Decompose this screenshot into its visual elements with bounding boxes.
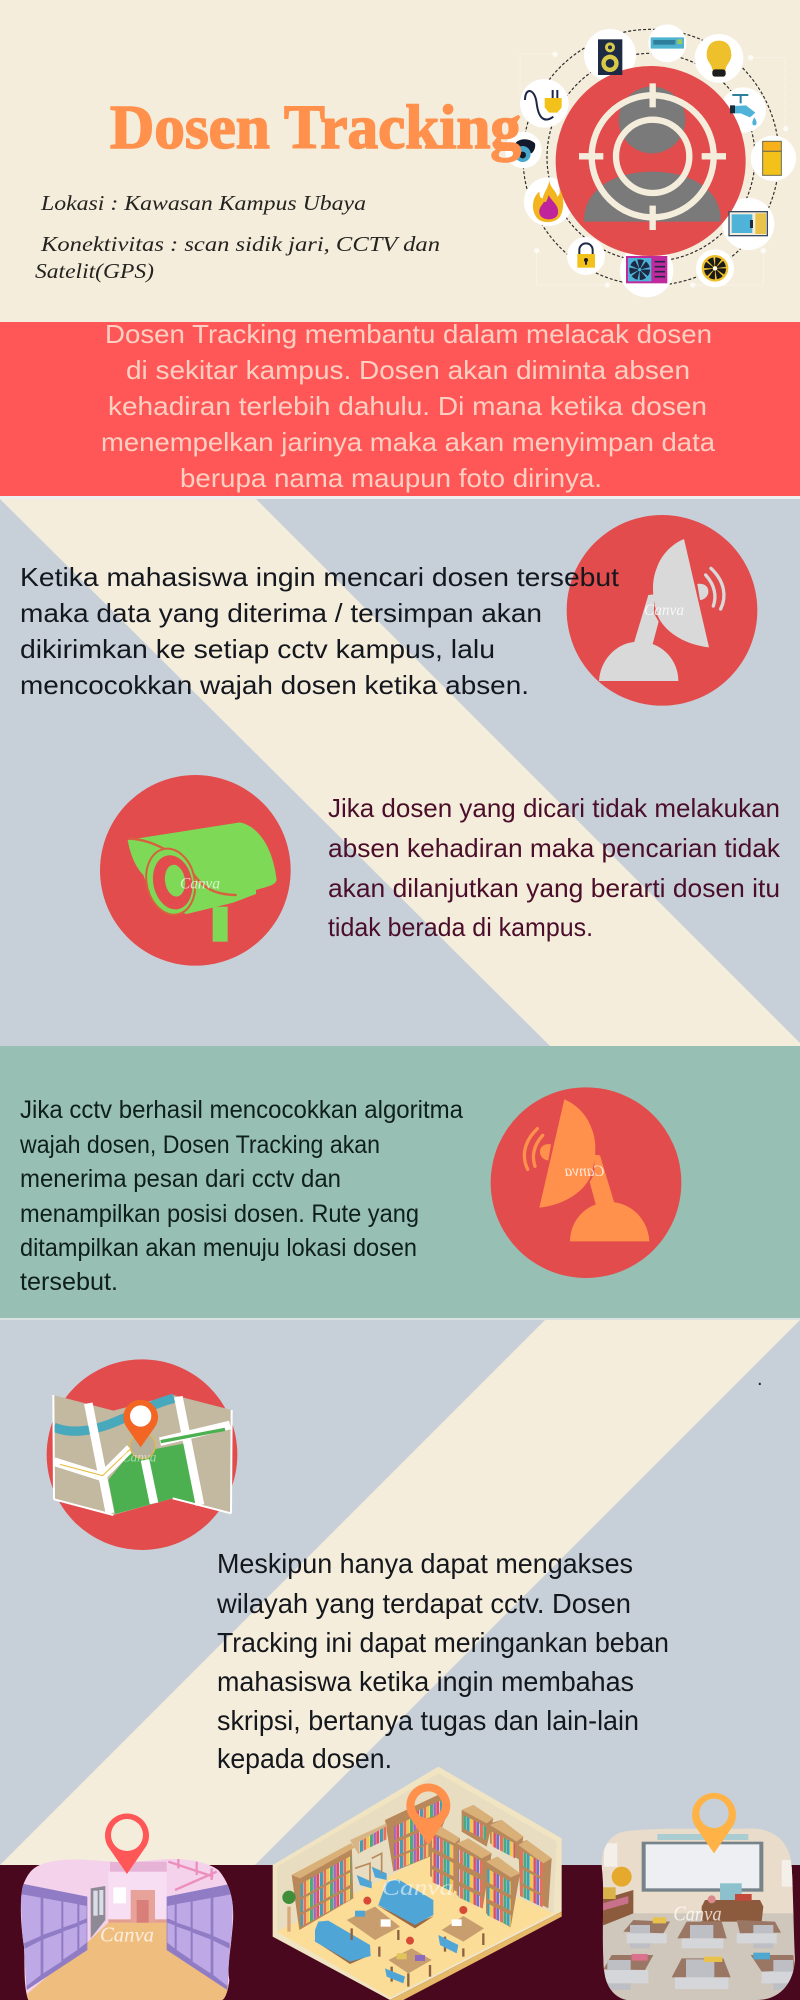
device icon backgrounds <box>505 24 796 297</box>
header illustration: tracked person and device ring <box>505 24 796 297</box>
text block: absent lecturer: Jika dosen yang dicari tidak melakukan <box>328 793 780 823</box>
location and connectivity text: Konektivitas : scan sidik jari, CCTV dan <box>40 232 440 256</box>
intro paragraph: di sekitar kampus. Dosen akan diminta absen <box>126 355 690 385</box>
panel: lower steps background <box>0 1320 800 1865</box>
text block: camera matching: dikirimkan ke setiap cctv kampus, lalu <box>20 634 495 664</box>
icon: padlock <box>577 243 595 268</box>
intro paragraph: Dosen Tracking membantu dalam melacak dosen <box>105 319 712 349</box>
text block: position shown: ditampilkan akan menuju lokasi dosen <box>20 1234 417 1262</box>
text block: closing paragraph: kepada dosen. <box>217 1743 392 1774</box>
icon: power plug <box>525 90 562 120</box>
text block: absent lecturer <box>328 793 781 942</box>
text block: camera matching <box>20 562 620 700</box>
intro paragraph <box>101 319 716 493</box>
tables <box>347 1907 484 1987</box>
stray full stop: . <box>757 1368 763 1390</box>
text block: closing paragraph <box>216 1548 669 1774</box>
left lockers <box>21 1883 87 1990</box>
location and connectivity text: Lokasi : Kawasan Kampus Ubaya <box>40 191 366 215</box>
illustration: locker corridor with red pin <box>17 1814 240 2000</box>
text block: position shown: wajah dosen, Dosen Tracking akan <box>19 1131 380 1159</box>
text block: absent lecturer: akan dilanjutkan yang berarti dosen itu <box>328 873 780 903</box>
text block: closing paragraph: Meskipun hanya dapat mengakses <box>217 1548 633 1579</box>
map pin <box>123 1400 158 1447</box>
text block: closing paragraph: mahasiswa ketika ingin membahas <box>217 1666 634 1697</box>
watermark: Canva <box>122 1450 157 1465</box>
student desks <box>603 1917 795 1990</box>
location pin: yellow <box>692 1793 736 1853</box>
icon: fan <box>702 255 728 282</box>
chairs <box>355 1853 387 1888</box>
panel: maroon footer <box>0 1865 800 2000</box>
watermark: Canva <box>100 1923 154 1947</box>
crosshair <box>579 83 726 230</box>
plant <box>282 1891 296 1932</box>
icon: orange satellite dish <box>491 1087 681 1278</box>
text block: absent lecturer: absen kehadiran maka pencarian tidak <box>328 833 781 863</box>
location and connectivity text: Satelit(GPS) <box>35 259 154 283</box>
projector screen <box>642 1834 763 1892</box>
text block: closing paragraph: skripsi, bertanya tugas dan lain-lain <box>217 1705 639 1736</box>
icon: green CCTV camera <box>100 775 291 966</box>
text block: absent lecturer: tidak berada di kampus. <box>328 912 593 942</box>
wall rack <box>350 1823 387 1854</box>
text block: camera matching: Ketika mahasiswa ingin mencari dosen tersebut <box>20 562 620 592</box>
icon: control panel <box>626 256 667 283</box>
icon: folded map with pin <box>47 1359 237 1550</box>
icon: camera lens <box>514 139 535 162</box>
text block: position shown: tersebut. <box>20 1268 118 1296</box>
panel: red introduction banner <box>0 319 800 496</box>
icon: microwave <box>729 212 767 236</box>
text block: camera matching: maka data yang diterima / tersimpan akan <box>20 598 542 628</box>
intro paragraph: berupa nama maupun foto dirinya. <box>180 463 602 493</box>
icon: air conditioner <box>651 37 684 49</box>
watermark: Canva <box>382 1875 453 1901</box>
intro paragraph: menempelkan jarinya maka akan menyimpan data <box>101 427 716 457</box>
text block: position shown <box>19 1096 463 1296</box>
panel: teal step <box>0 1046 800 1320</box>
location pin: red <box>105 1814 149 1874</box>
right lockers <box>167 1883 233 1990</box>
right shelves <box>430 1805 552 1927</box>
title: Dosen Tracking <box>110 94 521 162</box>
location and connectivity text <box>35 191 440 283</box>
left shelf <box>292 1843 355 1930</box>
text block: position shown: menerima pesan dari cctv dan <box>20 1165 341 1193</box>
intro paragraph: kehadiran terlebih dahulu. Di mana ketika dosen <box>108 391 707 421</box>
sofas <box>313 1879 434 1964</box>
red target disc <box>556 66 746 256</box>
icon: light bulb <box>707 41 731 77</box>
text block: camera matching: mencocokkan wajah dosen ketika absen. <box>20 670 529 700</box>
watermark: Canva <box>673 1904 722 1926</box>
text block: closing paragraph: wilayah yang terdapat cctv. Dosen <box>216 1588 631 1619</box>
teacher desk <box>702 1883 763 1922</box>
watermark: Canva <box>564 1163 605 1180</box>
globe and cabinet <box>600 1867 633 1927</box>
person silhouette <box>584 87 721 222</box>
watermark: Canva <box>644 602 684 619</box>
icon: speaker <box>598 39 622 75</box>
location pin: orange <box>406 1784 450 1845</box>
panel: upper steps background <box>0 496 800 1046</box>
icon: water tap <box>730 95 757 125</box>
illustration: classroom with yellow pin <box>600 1793 797 2000</box>
watermark: Canva <box>180 875 220 892</box>
table lamps and seats <box>355 1897 467 1983</box>
dashed rings <box>523 29 779 285</box>
icon: flame <box>533 180 563 222</box>
text block: closing paragraph: Tracking ini dapat meringankan beban <box>217 1627 669 1658</box>
icon: refrigerator <box>763 141 781 175</box>
text block: position shown: menampilkan posisi dosen. Rute yang <box>20 1200 419 1228</box>
faint corner frame <box>520 53 785 285</box>
back shelf <box>385 1792 445 1872</box>
header background <box>0 0 800 323</box>
illustration: isometric library with orange pin <box>273 1767 562 2000</box>
text block: position shown: Jika cctv berhasil mencocokkan algoritma <box>20 1096 463 1124</box>
icon: grey satellite dish <box>567 515 757 706</box>
